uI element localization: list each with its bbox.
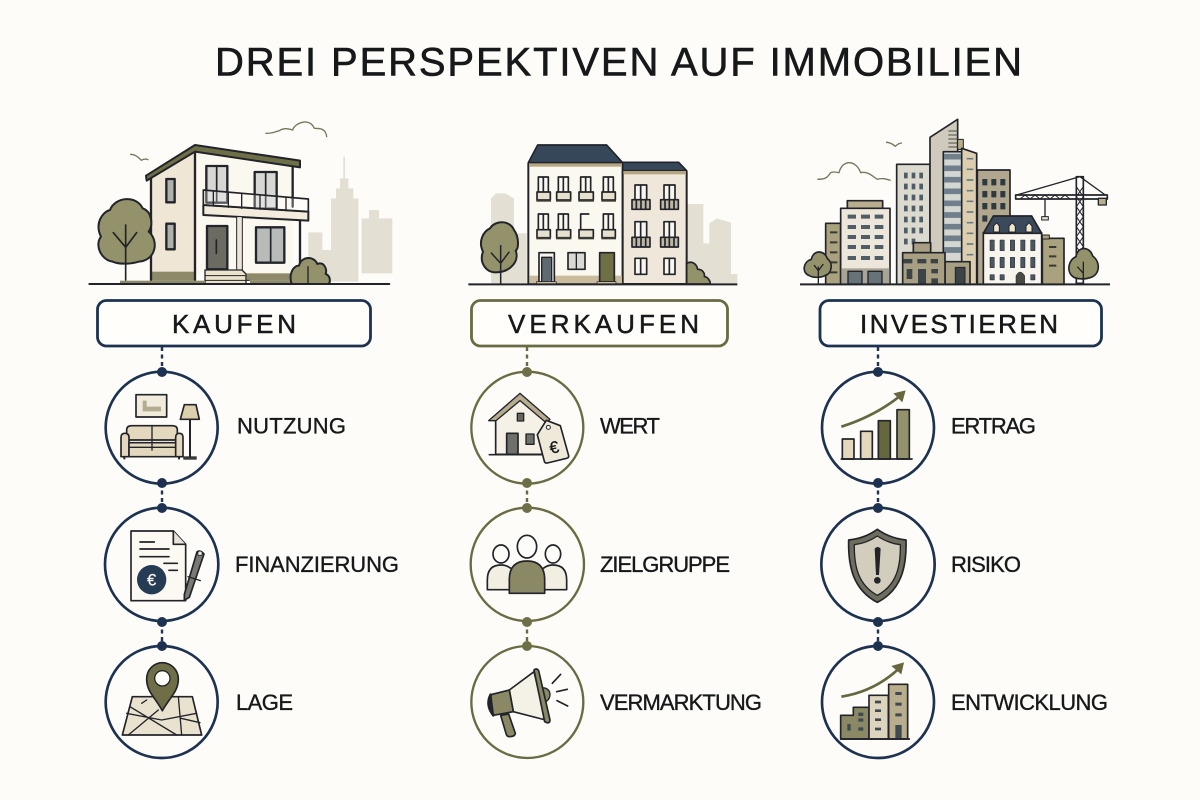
connector nodes: Verkaufen <box>522 367 532 651</box>
item: Vermarktung <box>471 646 762 758</box>
item: Entwicklung <box>822 646 1108 758</box>
label: Wert: WERT <box>600 413 660 438</box>
heading box: Kaufen: KAUFEN <box>172 309 296 339</box>
icon: megaphone <box>471 646 583 758</box>
connector nodes: Investieren <box>873 367 883 651</box>
label: Lage: LAGE <box>236 690 293 715</box>
heading box: Investieren <box>820 300 1102 346</box>
heading box: Kaufen <box>98 300 370 346</box>
label: Vermarktung: VERMARKTUNG <box>600 690 762 715</box>
heading box: Verkaufen: VERKAUFEN <box>508 309 699 339</box>
icon: rising bar chart <box>822 372 934 484</box>
illustration: city skyline and crane <box>800 119 1110 284</box>
icon: warning shield <box>821 508 935 621</box>
icon: contract with euro and pen <box>105 508 218 621</box>
connector: Kaufen <box>161 347 163 646</box>
item: Finanzierung <box>105 508 399 621</box>
icon: sofa and lamp <box>106 372 218 484</box>
panel: Investieren <box>800 119 1110 758</box>
heading box: Investieren: INVESTIEREN <box>860 309 1058 339</box>
connector: Verkaufen <box>526 347 528 646</box>
item: Wert <box>471 372 660 484</box>
heading box: Verkaufen <box>472 300 728 346</box>
item: Zielgruppe <box>471 508 730 621</box>
title: DREI PERSPEKTIVEN AUF IMMOBILIEN <box>215 40 1022 84</box>
panel: Kaufen <box>89 122 399 758</box>
connector: Investieren <box>877 347 879 646</box>
icon: contract with euro and pen: € <box>147 571 157 590</box>
icon: house with price tag: € <box>548 437 561 458</box>
icon: rising buildings <box>822 646 934 758</box>
label: Ertrag: ERTRAG <box>951 413 1036 438</box>
item: Lage <box>106 646 293 758</box>
illustration: family house <box>89 122 392 284</box>
item: Nutzung <box>106 372 346 484</box>
label: Entwicklung: ENTWICKLUNG <box>951 690 1108 715</box>
label: Nutzung: NUTZUNG <box>237 413 346 438</box>
connector nodes: Kaufen <box>157 367 167 651</box>
item: Ertrag <box>822 372 1036 484</box>
item: Risiko <box>821 508 1021 621</box>
illustration: townhouses <box>468 145 737 284</box>
label: Zielgruppe: ZIELGRUPPE <box>600 552 730 577</box>
icon: house with price tag <box>471 372 583 484</box>
label: Finanzierung: FINANZIERUNG <box>235 552 399 577</box>
icon: target group people <box>471 508 584 621</box>
crane <box>1016 177 1107 283</box>
label: Risiko: RISIKO <box>951 552 1021 577</box>
panel: Verkaufen <box>468 145 762 758</box>
icon: map with pin <box>106 646 218 758</box>
